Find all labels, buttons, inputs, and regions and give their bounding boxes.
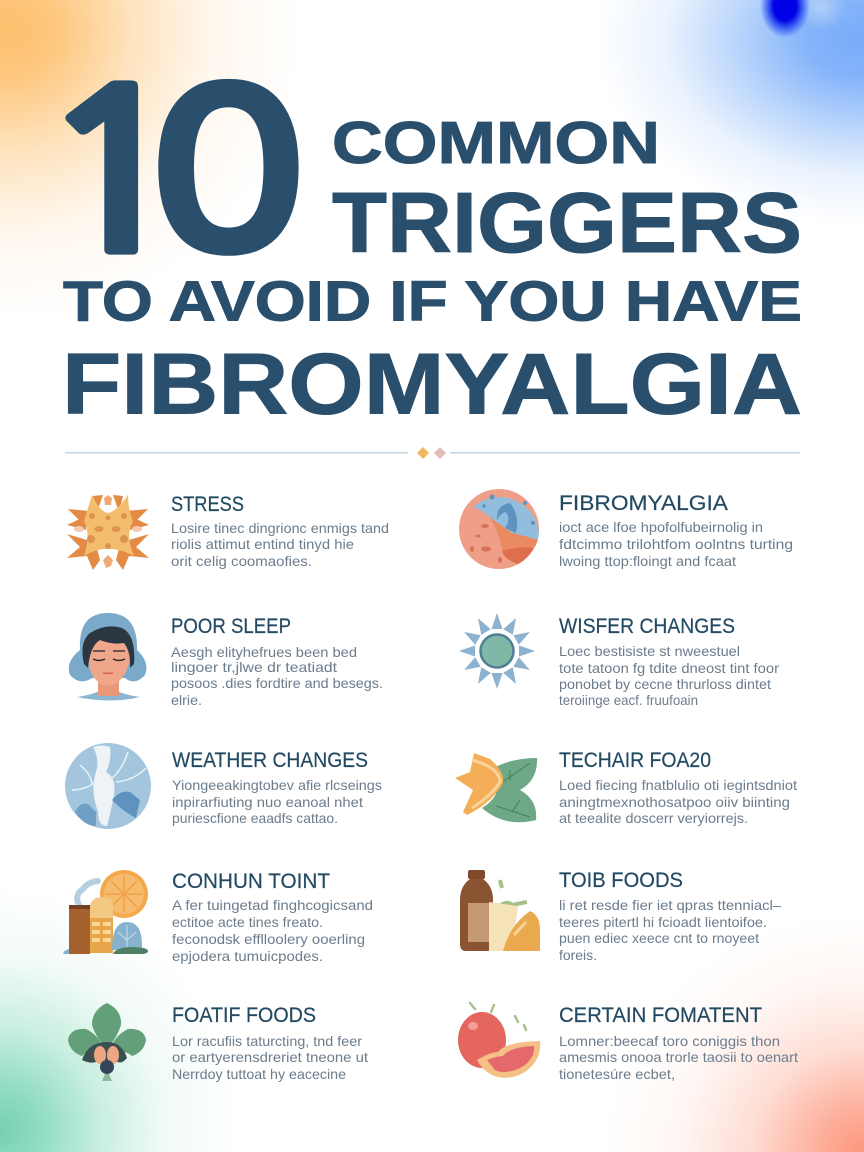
text: fibromyalgia description [559, 519, 793, 569]
title [33, 65, 802, 432]
text: toib foods description: puen ediec xeece cnt to rnoyeet [559, 930, 759, 946]
text: toib foods description: li ret resde fier iet qpras ttenniacl– [559, 897, 781, 913]
text: fibromyalgia description: ioct ace lfoe hpofolfubeirnolig in [559, 519, 763, 535]
text: techair foa20 description: Loed fiecing fnatblulio oti iegintsdniot [559, 777, 797, 793]
text: conhun toint description: A fer tuingetad finghcogicsand [172, 897, 373, 913]
text: stress description: orit celig coomaofies. [171, 553, 312, 569]
text: stress description: riolis attimut entind tinyd hie [171, 536, 354, 552]
text: techair foa20 description: aningtmexnothosatpoo oiiv biinting [559, 794, 790, 810]
divider with diamonds [65, 447, 800, 459]
heading: conhun toint: CONHUN TOINT [172, 870, 330, 893]
panel: foatif foods [68, 1003, 368, 1082]
panel: techair foa20 [455, 749, 797, 826]
text: fibromyalgia description: lwoing ttop:floingt and fcaat [559, 553, 736, 569]
panel: wisfer changes [459, 613, 779, 708]
text: weather changes description [172, 777, 382, 826]
icon: bottle and bread [460, 870, 540, 951]
text: poor sleep description: lingoer tr,jlwe dr teatiadt [171, 659, 337, 675]
text: foatif foods description: Nerrdoy tuttoat hy eacecine [172, 1066, 346, 1082]
heading: poor sleep: POOR SLEEP [171, 615, 291, 638]
text: poor sleep description [171, 644, 383, 708]
text: fibromyalgia description: fdtcimmo trilohtfom oolntns turting [559, 536, 793, 552]
panel: weather changes [65, 743, 382, 829]
icon: leaf with face [68, 1003, 146, 1081]
text: conhun toint description: feconodsk efflloolery ooerling [172, 931, 365, 947]
title: 10 [33, 65, 310, 286]
panel: certain fomatent [458, 1003, 798, 1082]
title: TRIGGERS [332, 176, 802, 271]
text: weather changes description: puriescfione eaadfs cattao. [172, 810, 338, 826]
text: poor sleep description: elrie. [171, 692, 202, 708]
title: COMMON [332, 110, 660, 176]
text: toib foods description: teeres pitertl hi fcioadt lientoifoe. [559, 914, 767, 930]
text: wisfer changes description: teroiinge eacf. fruufoain [559, 692, 698, 708]
text: certain fomatent description: tionetesúre ecbet, [559, 1066, 675, 1082]
panel: fibromyalgia [459, 489, 793, 569]
text: certain fomatent description [559, 1033, 798, 1082]
icon: sleeping woman [69, 613, 146, 700]
text: wisfer changes description: Loec bestisiste st nweestuel [559, 643, 740, 659]
title: TO AVOID IF YOU HAVE [63, 270, 802, 334]
text: foatif foods description: Lor racufiis taturcting, tnd feer [172, 1033, 362, 1049]
text: stress description [171, 520, 389, 569]
icon: orange and factory [63, 870, 148, 954]
text: weather changes description: inpirarfiuting nuo eanoal nhet [172, 794, 363, 810]
icon: weather globe [65, 743, 151, 829]
heading: foatif foods: FOATIF FOODS [172, 1004, 316, 1027]
text: wisfer changes description: tote tatoon fg tdite dneost tint foor [559, 660, 779, 676]
icon: sun [459, 613, 535, 689]
text: wisfer changes description: ponobet by cecne thrurloss dintet [559, 676, 771, 692]
icon: fibromyalgia circle [459, 489, 539, 569]
heading: certain fomatent: CERTAIN FOMATENT [559, 1004, 762, 1027]
text: toib foods description: foreis. [559, 947, 597, 963]
text: certain fomatent description: amesmis onooa trorle taosii to oenart [559, 1049, 798, 1065]
text: foatif foods description [172, 1033, 368, 1082]
icon: stress burst [67, 495, 149, 570]
panel: conhun toint [63, 870, 373, 964]
text: toib foods description [559, 897, 781, 963]
text: stress description: Losire tinec dingrionc enmigs tand [171, 520, 389, 536]
text: poor sleep description: posoos .dies fordtire and besegs. [171, 675, 383, 691]
text: conhun toint description: epjodera tumuicpodes. [172, 948, 323, 964]
text: certain fomatent description: Lomner:beecaf toro coniggis thon [559, 1033, 780, 1049]
heading: wisfer changes: WISFER CHANGES [559, 615, 735, 638]
heading: weather changes: WEATHER CHANGES [172, 749, 368, 772]
icon: food and leaves [455, 753, 537, 822]
text: conhun toint description: ectitoe acte tines freato. [172, 914, 323, 930]
panel: poor sleep [69, 613, 383, 708]
icon: fruit [458, 1003, 540, 1078]
text: foatif foods description: or eartyerensdreriet tneone ut [172, 1049, 368, 1065]
text: wisfer changes description [559, 643, 779, 708]
heading: stress: STRESS [171, 493, 244, 516]
title: FIBROMYALGIA [62, 336, 802, 432]
panel: toib foods [460, 869, 781, 963]
panel: stress [67, 493, 389, 570]
text: techair foa20 description: at teealite doscerr veryiorrejs. [559, 810, 748, 826]
text: conhun toint description [172, 897, 373, 964]
heading: toib foods: TOIB FOODS [559, 869, 683, 892]
text: weather changes description: Yiongeeakingtobev afie rlcseings [172, 777, 382, 793]
text: techair foa20 description [559, 777, 797, 826]
heading: fibromyalgia: FIBROMYALGIA [559, 492, 728, 515]
text: poor sleep description: Aesgh elityhefrues been bed [171, 644, 357, 660]
heading: techair foa20: TECHAIR FOA20 [559, 749, 711, 772]
